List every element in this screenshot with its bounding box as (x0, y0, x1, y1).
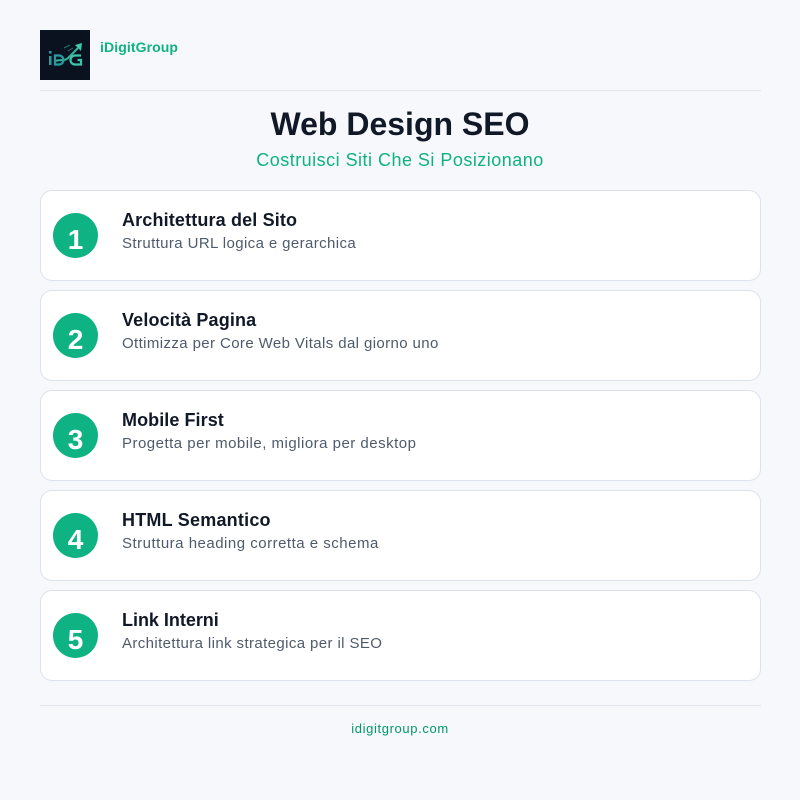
card 1 heading: Architettura del Sito (122, 210, 297, 230)
card 3 description: Progetta per mobile, migliora per desktop (122, 435, 416, 452)
card 5 (40, 590, 761, 681)
brand name: iDigitGroup (100, 39, 178, 55)
card 5 heading: Link Interni (122, 610, 219, 630)
title: Web Design SEO (270, 106, 530, 142)
card 3 (40, 390, 761, 481)
card 4 heading: HTML Semantico (122, 510, 271, 530)
number 2 (53, 313, 98, 358)
card 1 (40, 190, 761, 281)
header logo (40, 30, 90, 80)
footer url: idigitgroup.com (351, 721, 449, 736)
card 2 description: Ottimizza per Core Web Vitals dal giorno uno (122, 335, 439, 352)
number 3 (53, 413, 98, 458)
number 3: 3 (68, 424, 83, 455)
number 5 (53, 613, 98, 658)
card 5 description: Architettura link strategica per il SEO (122, 635, 382, 652)
number 2: 2 (68, 324, 83, 355)
card 4 description: Struttura heading corretta e schema (122, 535, 379, 552)
card 2 (40, 290, 761, 381)
card 4 (40, 490, 761, 581)
card 3 heading: Mobile First (122, 410, 224, 430)
number 4: 4 (68, 524, 83, 555)
card 1 description: Struttura URL logica e gerarchica (122, 235, 356, 252)
card 2 heading: Velocità Pagina (122, 310, 256, 330)
number 4 (53, 513, 98, 558)
number 1 (53, 213, 98, 258)
number 5: 5 (68, 624, 83, 655)
subtitle: Costruisci Siti Che Si Posizionano (256, 150, 544, 170)
number 1: 1 (68, 224, 83, 255)
